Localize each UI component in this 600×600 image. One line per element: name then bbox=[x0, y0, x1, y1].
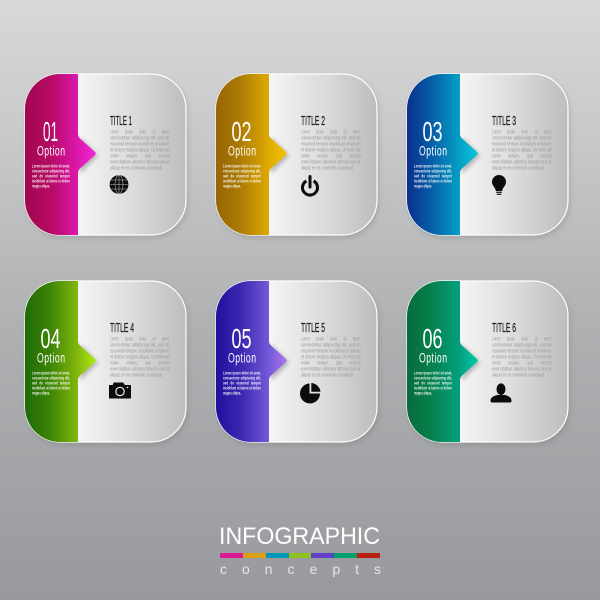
panel: card 3 bbox=[407, 74, 570, 238]
body text 5: Lorem ipsum dolor sit amet, bbox=[301, 336, 360, 342]
colour band 2 bbox=[216, 74, 287, 235]
band text: incididunt ut labore et dolore bbox=[223, 178, 261, 184]
band text: incididunt ut labore et dolore bbox=[32, 178, 70, 184]
panel: card 2 bbox=[216, 74, 379, 238]
body text 3: aliquip ex ea commodo consequat. bbox=[492, 166, 545, 172]
band text: consectetur adipiscing elit, bbox=[32, 168, 70, 174]
number 04: 04 bbox=[40, 323, 60, 354]
band text: incididunt ut labore et dolore bbox=[32, 386, 70, 390]
body text 1: eiusmod tempor incididunt ut labore bbox=[110, 142, 170, 148]
title 4: TITLE 4 bbox=[110, 321, 134, 335]
body text 3: et dolore magna aliqua. Ut enim ad bbox=[492, 148, 552, 154]
panel: card 4 bbox=[25, 281, 188, 445]
colour band 3 bbox=[407, 74, 478, 235]
body text 4: minim veniam, quis nostrud bbox=[110, 360, 170, 366]
body text 1: exercitation ullamco laboris nisi ut bbox=[110, 160, 170, 166]
band text bbox=[223, 164, 261, 188]
body text 1: consectetur adipiscing elit, sed do bbox=[110, 136, 170, 142]
footer title: INFOGRAPHIC bbox=[219, 523, 380, 550]
body text 4: eiusmod tempor incididunt ut labore bbox=[110, 348, 170, 354]
body text 3: consectetur adipiscing elit, sed do bbox=[492, 136, 552, 142]
body text 2: Lorem ipsum dolor sit amet, bbox=[301, 130, 360, 136]
title 5: TITLE 5 bbox=[301, 321, 325, 335]
band text: sed do eiusmod tempor bbox=[32, 380, 70, 386]
body text 4: Lorem ipsum dolor sit amet, bbox=[110, 336, 170, 342]
band text bbox=[223, 370, 261, 396]
colour band 4 bbox=[25, 281, 96, 442]
option label: Option bbox=[228, 350, 256, 366]
band text bbox=[32, 370, 70, 396]
number 06: 06 bbox=[422, 323, 442, 354]
title 3: TITLE 3 bbox=[492, 114, 516, 128]
panel: card 1: 01 bbox=[43, 116, 58, 147]
body text 5: minim veniam, quis nostrud bbox=[301, 360, 361, 366]
body text 1: aliquip ex ea commodo consequat. bbox=[110, 166, 163, 172]
body text 5: exercitation ullamco laboris nisi ut bbox=[301, 366, 361, 372]
band text: Lorem ipsum dolor sit amet, bbox=[414, 164, 452, 168]
band text: magna aliqua. bbox=[414, 390, 432, 396]
band text: sed do eiusmod tempor bbox=[414, 380, 452, 386]
band text: magna aliqua. bbox=[223, 390, 241, 396]
footer subtitle: concepts bbox=[220, 561, 381, 577]
panel: card 1: TITLE 1 bbox=[110, 114, 132, 128]
panel: card 6 bbox=[407, 281, 570, 445]
body text 6 bbox=[492, 336, 552, 378]
band text: incididunt ut labore et dolore bbox=[223, 386, 261, 390]
band text: sed do eiusmod tempor bbox=[414, 174, 452, 178]
body text 2: eiusmod tempor incididunt ut labore bbox=[301, 142, 361, 148]
band text: sed do eiusmod tempor bbox=[32, 174, 70, 178]
band text: incididunt ut labore et dolore bbox=[414, 178, 452, 184]
body text 6: et dolore magna aliqua. Ut enim ad bbox=[492, 354, 552, 360]
band text: consectetur adipiscing elit, bbox=[414, 376, 452, 380]
body text 5: consectetur adipiscing elit, sed do bbox=[301, 342, 361, 348]
band text: Lorem ipsum dolor sit amet, bbox=[32, 370, 70, 376]
number 02: 02 bbox=[232, 116, 252, 147]
body text 6: aliquip ex ea commodo consequat. bbox=[492, 372, 545, 378]
band text: magna aliqua. bbox=[223, 184, 241, 188]
body text 4 bbox=[110, 336, 170, 378]
title 6: TITLE 6 bbox=[492, 321, 516, 335]
icon: power bbox=[302, 176, 318, 195]
icon: globe bbox=[110, 175, 128, 194]
option label: Option bbox=[37, 350, 65, 366]
body text 1: et dolore magna aliqua. Ut enim ad bbox=[110, 148, 170, 154]
band text bbox=[414, 164, 452, 188]
body text 6: eiusmod tempor incididunt ut labore bbox=[492, 348, 552, 354]
body text 2: aliquip ex ea commodo consequat. bbox=[301, 166, 354, 172]
band text: consectetur adipiscing elit, bbox=[223, 376, 261, 380]
body text 6: exercitation ullamco laboris nisi ut bbox=[492, 366, 552, 372]
band text bbox=[414, 370, 452, 396]
band text: consectetur adipiscing elit, bbox=[32, 376, 70, 380]
colour band 6 bbox=[407, 281, 478, 442]
body text 3: minim veniam, quis nostrud bbox=[492, 154, 552, 160]
body text 2 bbox=[301, 130, 361, 172]
band text: magna aliqua. bbox=[414, 184, 432, 188]
body text 6: minim veniam, quis nostrud bbox=[492, 360, 552, 366]
band text: incididunt ut labore et dolore bbox=[414, 386, 452, 390]
option label: Option bbox=[419, 350, 447, 366]
band text bbox=[32, 164, 70, 188]
icon: camera bbox=[110, 383, 130, 398]
band text: consectetur adipiscing elit, bbox=[414, 168, 452, 174]
band text: Lorem ipsum dolor sit amet, bbox=[223, 164, 261, 168]
icon: pie chart bbox=[300, 383, 320, 403]
body text 1: minim veniam, quis nostrud bbox=[110, 154, 170, 160]
option label: Option bbox=[37, 143, 65, 159]
band text: Lorem ipsum dolor sit amet, bbox=[32, 164, 70, 168]
body text 2: exercitation ullamco laboris nisi ut bbox=[301, 160, 361, 166]
body text 4: exercitation ullamco laboris nisi ut bbox=[110, 366, 170, 372]
body text 3: Lorem ipsum dolor sit amet, bbox=[492, 130, 552, 136]
body text 5: et dolore magna aliqua. Ut enim ad bbox=[301, 354, 361, 360]
panel: card 1 bbox=[25, 74, 188, 238]
title 2: TITLE 2 bbox=[301, 114, 325, 128]
body text 2: consectetur adipiscing elit, sed do bbox=[301, 136, 361, 142]
band text: Lorem ipsum dolor sit amet, bbox=[223, 370, 261, 376]
icon: light bulb bbox=[492, 175, 506, 195]
icon: person bbox=[490, 383, 512, 402]
body text 2: et dolore magna aliqua. Ut enim ad bbox=[301, 148, 361, 154]
colour band 1 bbox=[25, 74, 96, 235]
colour bar bbox=[220, 553, 380, 558]
band text: Lorem ipsum dolor sit amet, bbox=[414, 370, 452, 376]
band text: sed do eiusmod tempor bbox=[223, 174, 261, 178]
band text: sed do eiusmod tempor bbox=[223, 380, 261, 386]
body text 5: aliquip ex ea commodo consequat. bbox=[301, 372, 354, 378]
body text 5: eiusmod tempor incididunt ut labore bbox=[301, 348, 361, 354]
band text: magna aliqua. bbox=[32, 390, 50, 396]
body text 1 bbox=[110, 130, 170, 172]
body text 4: consectetur adipiscing elit, sed do bbox=[110, 342, 170, 348]
body text 3 bbox=[492, 130, 552, 172]
body text 6: Lorem ipsum dolor sit amet, bbox=[492, 336, 552, 342]
body text 3: eiusmod tempor incididunt ut labore bbox=[492, 142, 552, 148]
number 05: 05 bbox=[232, 323, 252, 354]
body text 2: minim veniam, quis nostrud bbox=[301, 154, 361, 160]
body text 5 bbox=[301, 336, 361, 378]
colour band 5 bbox=[216, 281, 287, 442]
body text 1: Lorem ipsum dolor sit amet, bbox=[110, 130, 170, 136]
option label: Option bbox=[419, 143, 447, 159]
band text: consectetur adipiscing elit, bbox=[223, 168, 261, 174]
number 03: 03 bbox=[422, 116, 442, 147]
body text 3: exercitation ullamco laboris nisi ut bbox=[492, 160, 552, 166]
body text 6: consectetur adipiscing elit, sed do bbox=[492, 342, 552, 348]
option label: Option bbox=[228, 143, 256, 159]
band text: magna aliqua. bbox=[32, 184, 50, 188]
panel: card 5 bbox=[216, 281, 379, 445]
body text 4: aliquip ex ea commodo consequat. bbox=[110, 372, 163, 378]
body text 4: et dolore magna aliqua. Ut enim ad bbox=[110, 354, 170, 360]
